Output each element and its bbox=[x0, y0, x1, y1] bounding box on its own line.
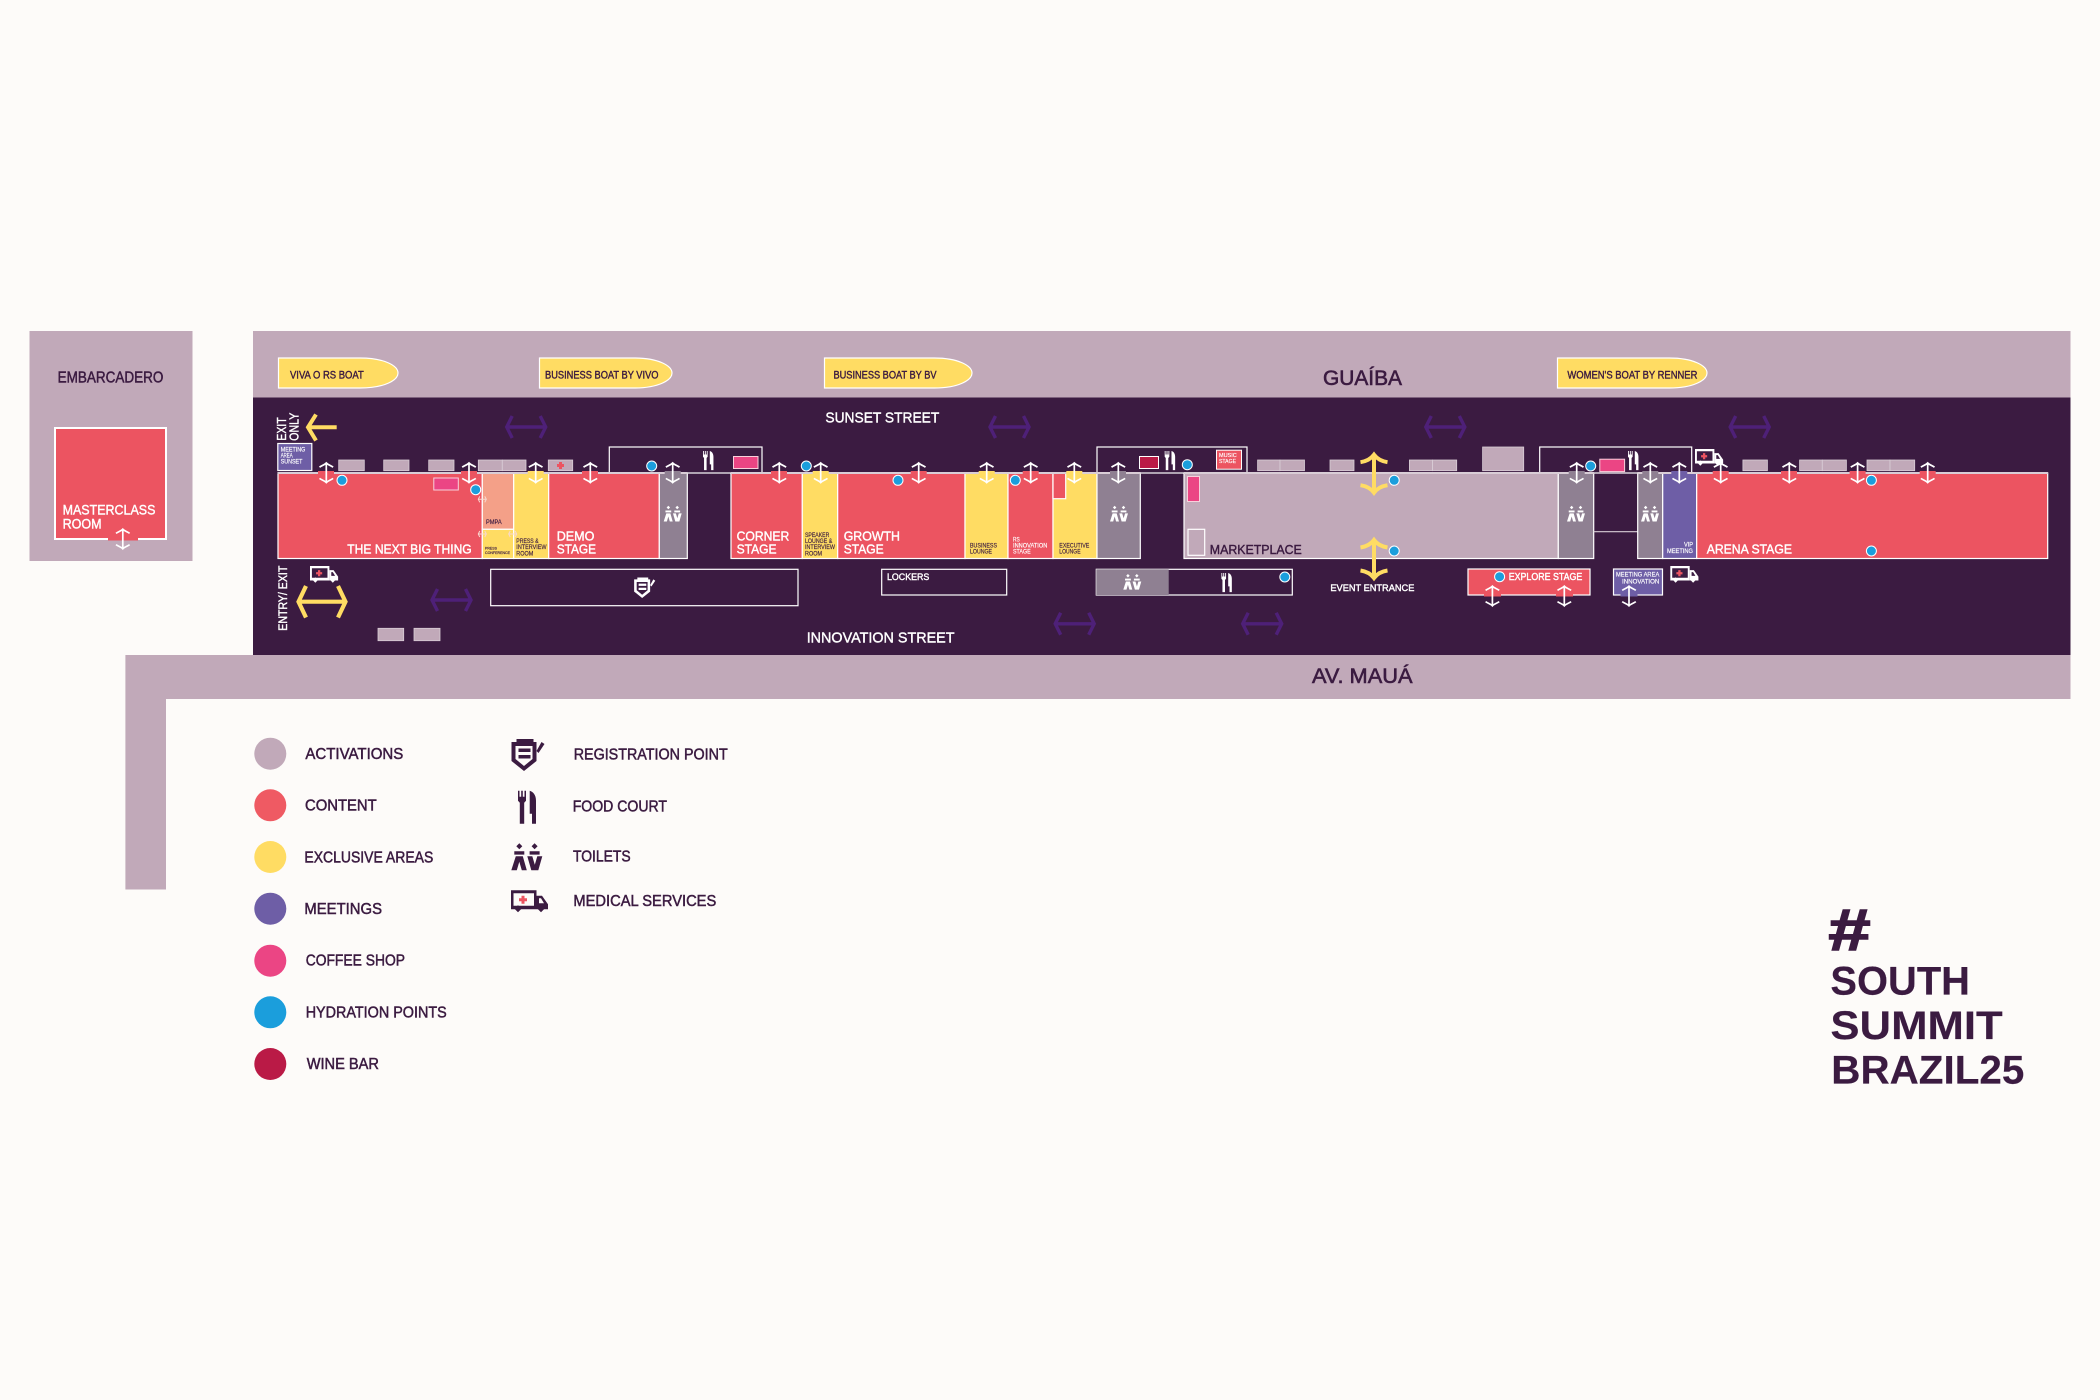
exit only label: ONLY bbox=[286, 412, 301, 441]
coffee shop: food court 1 bbox=[734, 456, 758, 468]
boat: womens by renner: WOMEN'S BOAT BY RENNER bbox=[1567, 370, 1697, 382]
connector line bbox=[1594, 531, 1638, 533]
wine bar bbox=[1140, 456, 1158, 468]
meeting area innovation bbox=[1614, 569, 1662, 596]
legend item: wine bar bbox=[254, 1048, 379, 1080]
room: business lounge: BUSINESS bbox=[970, 543, 997, 549]
room: speaker lounge: SPEAKER bbox=[805, 533, 830, 539]
lockers box bbox=[882, 569, 1007, 595]
room: growth stage bbox=[838, 473, 965, 558]
legend item: meetings bbox=[254, 893, 382, 925]
entry exit label: ENTRY/ EXIT bbox=[278, 566, 290, 631]
room: growth stage: STAGE bbox=[844, 541, 884, 556]
music stage: MUSIC bbox=[1219, 453, 1237, 459]
logo: south summit brazil25: SOUTH bbox=[1830, 959, 1970, 1003]
coffee shop: food court 3 bbox=[1600, 459, 1625, 472]
room: demo stage: STAGE bbox=[557, 541, 596, 556]
room: growth stage: GROWTH bbox=[844, 529, 900, 544]
room: speaker lounge: ROOM bbox=[805, 551, 822, 557]
room: speaker lounge: LOUNGE & bbox=[805, 539, 832, 545]
guaiba label: GUAÍBA bbox=[1323, 367, 1402, 390]
room: rs innovation stage: RS bbox=[1013, 537, 1020, 543]
room: speaker lounge bbox=[802, 473, 838, 558]
room: corner stage: STAGE bbox=[737, 541, 777, 556]
room: press conference bbox=[482, 529, 514, 558]
room: pmpa bbox=[482, 473, 514, 529]
boat: business by vivo bbox=[540, 358, 672, 388]
sunset street label: SUNSET STREET bbox=[825, 409, 939, 426]
room: business lounge: LOUNGE bbox=[970, 549, 992, 555]
legend item: exclusive areas: EXCLUSIVE AREAS bbox=[304, 849, 433, 866]
boat: business by bv: BUSINESS BOAT BY BV bbox=[834, 370, 937, 382]
meeting area sunset: SUNSET bbox=[281, 459, 303, 466]
medical cross kiosk mark bbox=[557, 462, 564, 469]
hall top line bbox=[278, 472, 2048, 474]
room: press and interview: INTERVIEW bbox=[516, 544, 547, 551]
room: rs innovation stage: INNOVATION bbox=[1013, 543, 1047, 549]
embarcadero heading: EMBARCADERO bbox=[58, 369, 163, 386]
legend item: registration point bbox=[512, 739, 728, 771]
room: press and interview: PRESS & bbox=[516, 538, 539, 545]
guaiba river band bbox=[253, 331, 2070, 398]
legend item: exclusive areas bbox=[254, 841, 433, 873]
legend item: registration point: REGISTRATION POINT bbox=[574, 747, 728, 764]
masterclass room: MASTERCLASS bbox=[63, 503, 155, 518]
legend item: medical services: MEDICAL SERVICES bbox=[573, 893, 716, 910]
exit only label: EXIT bbox=[274, 417, 289, 441]
room: arena stage bbox=[1697, 473, 2048, 558]
logo: south summit brazil25: SUMMIT bbox=[1830, 1004, 2003, 1048]
icons: medical services bbox=[310, 449, 1723, 583]
lockers box: LOCKERS bbox=[887, 572, 929, 583]
legend: colour categories bbox=[254, 738, 447, 1080]
registration box bbox=[491, 569, 798, 606]
meeting area innovation: MEETING AREA bbox=[1616, 572, 1660, 579]
bottom toilets and food court box bbox=[1096, 569, 1292, 595]
legend item: meetings: MEETINGS bbox=[304, 901, 382, 918]
room: next big thing bbox=[278, 473, 482, 558]
arrows: street flow sunset bbox=[507, 416, 1769, 438]
masterclass room: ROOM bbox=[63, 517, 102, 532]
av maua label: AV. MAUÁ bbox=[1312, 665, 1412, 688]
legend item: food court: FOOD COURT bbox=[573, 798, 667, 815]
hydration points bbox=[337, 460, 1876, 582]
coffee shop: marketplace bbox=[1188, 476, 1200, 502]
explore stage: EXPLORE STAGE bbox=[1509, 572, 1583, 583]
innovation street label: INNOVATION STREET bbox=[807, 629, 954, 646]
logo: south summit brazil25: # bbox=[1828, 898, 1870, 963]
room: toilets 3 bbox=[1558, 473, 1594, 558]
room: executive lounge: LOUNGE bbox=[1059, 549, 1081, 555]
masterclass room bbox=[55, 428, 166, 549]
logo: south summit brazil25 bbox=[1828, 898, 2024, 1092]
legend item: coffee shop bbox=[254, 945, 405, 977]
legend item: content: CONTENT bbox=[305, 798, 377, 815]
legend item: toilets bbox=[511, 843, 631, 870]
room: vip meeting: VIP bbox=[1684, 542, 1693, 548]
coffee shop: next big thing bbox=[434, 478, 458, 490]
room: marketplace bbox=[1184, 473, 1558, 558]
logo: south summit brazil25: BRAZIL25 bbox=[1831, 1048, 2024, 1092]
room: business lounge bbox=[965, 473, 1008, 558]
legend item: wine bar: WINE BAR bbox=[307, 1056, 379, 1073]
legend item: medical services bbox=[511, 890, 716, 912]
boat: business by bv bbox=[824, 358, 972, 388]
street floor bbox=[253, 398, 2070, 655]
room: corner stage: CORNER bbox=[737, 529, 789, 544]
food court outline boxes bbox=[609, 447, 1692, 473]
panel: embarcadero bbox=[30, 331, 192, 561]
door notches bbox=[318, 471, 1936, 474]
legend item: activations: ACTIVATIONS bbox=[305, 746, 403, 763]
boat: business by vivo: BUSINESS BOAT BY VIVO bbox=[545, 370, 659, 382]
room: rs innovation stage bbox=[1008, 473, 1053, 558]
room: toilets 2 bbox=[1097, 473, 1140, 558]
arrows: hall doors bbox=[320, 463, 1934, 606]
room: speaker lounge: INTERVIEW bbox=[805, 545, 835, 551]
music stage bbox=[1216, 450, 1242, 469]
legend: icons bbox=[511, 739, 728, 912]
room: arena stage: ARENA STAGE bbox=[1707, 541, 1792, 556]
music stage: STAGE bbox=[1219, 459, 1236, 465]
exit only label bbox=[274, 412, 301, 441]
boat: viva o rs: VIVA O RS BOAT bbox=[290, 370, 364, 382]
meeting area sunset: AREA bbox=[281, 453, 293, 460]
icons: food court bbox=[703, 451, 1638, 592]
meeting area sunset: MEETING bbox=[281, 447, 305, 454]
room: toilets 1 bbox=[659, 473, 687, 558]
av maua road band bbox=[125, 655, 2070, 890]
activation kiosks bbox=[339, 447, 1915, 641]
meeting area sunset bbox=[278, 444, 312, 470]
arrows: street flow innovation bbox=[432, 589, 1282, 635]
room: pmpa: PMPA bbox=[486, 520, 502, 526]
room: press and interview bbox=[514, 473, 549, 558]
room: toilets 4 bbox=[1638, 473, 1663, 558]
room: vip meeting bbox=[1663, 473, 1697, 558]
room: executive lounge bbox=[1053, 473, 1097, 558]
legend item: hydration points bbox=[254, 996, 447, 1028]
legend item: food court bbox=[518, 791, 667, 824]
room: corner stage bbox=[731, 473, 802, 558]
boat: viva o rs bbox=[278, 358, 398, 388]
icon: registration bbox=[634, 578, 655, 598]
room: marketplace: MARKETPLACE bbox=[1210, 542, 1302, 557]
room: press conference: PRESS bbox=[485, 547, 497, 551]
room: vip meeting: MEETING bbox=[1667, 549, 1693, 555]
legend item: hydration points: HYDRATION POINTS bbox=[306, 1004, 447, 1021]
room: executive lounge: EXECUTIVE bbox=[1059, 543, 1089, 549]
room: next big thing: THE NEXT BIG THING bbox=[347, 541, 472, 556]
room: press and interview: ROOM bbox=[516, 550, 533, 557]
room: rs innovation stage: STAGE bbox=[1013, 549, 1031, 555]
legend item: content bbox=[254, 789, 377, 821]
room: demo stage: DEMO bbox=[557, 529, 594, 544]
icons: toilets bbox=[664, 506, 1659, 590]
meeting area innovation: INNOVATION bbox=[1622, 578, 1660, 585]
arrow: exit only bbox=[308, 414, 337, 440]
arrows: event entrance bbox=[1360, 455, 1388, 578]
room: demo stage bbox=[549, 473, 659, 558]
legend item: toilets: TOILETS bbox=[573, 849, 631, 866]
event entrance label: EVENT ENTRANCE bbox=[1330, 583, 1414, 594]
main hall bbox=[278, 473, 2048, 558]
explore stage bbox=[1468, 569, 1590, 596]
legend item: activations bbox=[254, 738, 403, 770]
arrows: small internal doors bbox=[478, 496, 517, 537]
arrow: entry exit bbox=[298, 586, 346, 618]
legend item: coffee shop: COFFEE SHOP bbox=[306, 953, 405, 970]
room: press conference: CONFERENCE bbox=[485, 551, 510, 555]
boat: womens by renner bbox=[1558, 358, 1707, 388]
